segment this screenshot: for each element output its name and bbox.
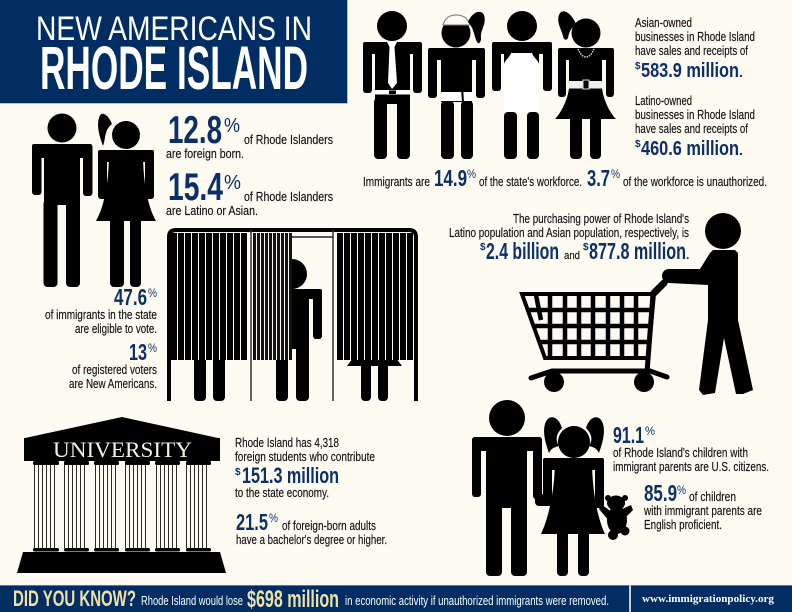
icon: university building: UNIVERSITY xyxy=(53,437,192,462)
text: purchasing power: . xyxy=(686,248,689,262)
stat: bachelor's degree: have a bachelor's degree or higher. xyxy=(236,532,387,547)
stat: children citizens xyxy=(613,422,769,474)
title banner xyxy=(0,0,348,104)
icon: university building xyxy=(17,417,226,573)
icon: four workers xyxy=(363,11,616,159)
text: Latino-owned businesses: 460.6 million xyxy=(641,138,739,160)
text: Asian-owned businesses: Asian-owned xyxy=(635,15,692,30)
text: Asian-owned businesses: 583.9 million xyxy=(641,60,739,82)
text: Latino-owned businesses: . xyxy=(739,142,743,158)
teddy bear xyxy=(599,495,633,540)
parent xyxy=(472,400,550,576)
text: workforce share: of the state's workforce. xyxy=(479,174,582,189)
did you know callout: DID YOU KNOW? xyxy=(13,586,136,611)
stat: eligible to vote: of immigrants in the state xyxy=(45,307,157,322)
text: Asian-owned businesses: . xyxy=(739,64,743,80)
stat: children citizens: % xyxy=(645,424,655,438)
right curtain xyxy=(337,233,413,360)
did you know callout xyxy=(13,586,609,612)
stat: Latino or Asian: are Latino or Asian. xyxy=(166,203,258,218)
text: foreign students: to the state economy. xyxy=(235,485,329,500)
icon: parent, child and teddy bear xyxy=(472,400,633,576)
text: purchasing power: 877.8 million xyxy=(589,238,686,264)
stat: eligible to vote: are eligible to vote. xyxy=(75,321,157,336)
stat: foreign born: of Rhode Islanders xyxy=(244,132,333,147)
stat: Latino or Asian: % xyxy=(224,172,241,194)
text: workforce share: 3.7 xyxy=(587,165,610,191)
shopping cart xyxy=(522,283,667,392)
stat: Latino or Asian: of Rhode Islanders xyxy=(244,189,333,204)
stat: Latino or Asian xyxy=(166,166,333,218)
did you know callout: Rhode Island would lose xyxy=(141,594,243,608)
legs in left booth xyxy=(194,355,225,401)
stat: registered voters xyxy=(69,339,157,391)
text: Asian-owned businesses: businesses in Rhode Island xyxy=(635,29,755,44)
stat: bachelor's degree: of foreign-born adults xyxy=(282,518,376,533)
stat: eligible to vote: % xyxy=(148,286,157,300)
text: Asian-owned businesses xyxy=(635,15,755,82)
stat: bachelor's degree xyxy=(236,509,387,547)
text: workforce share: % xyxy=(467,167,476,181)
text: foreign students: $ xyxy=(235,467,241,478)
stat: registered voters: of registered voters xyxy=(72,362,157,377)
stat: children citizens: 91.1 xyxy=(613,422,644,448)
icon: man and woman xyxy=(32,114,156,287)
stat: children English proficient xyxy=(643,480,762,532)
text: purchasing power: and xyxy=(564,250,580,262)
text: foreign students xyxy=(235,435,375,500)
booth frame xyxy=(169,230,416,401)
stat: foreign born: 12.8 xyxy=(168,109,222,152)
text: Latino-owned businesses: have sales and receipts of xyxy=(635,121,748,136)
worker: businessman with tie xyxy=(363,11,422,159)
worker: apron xyxy=(492,11,552,159)
stat: foreign born: % xyxy=(224,115,240,137)
voter in middle booth xyxy=(276,259,322,401)
stat: eligible to vote: 47.6 xyxy=(114,284,147,310)
stat: children English proficient: 85.9 xyxy=(644,480,677,506)
text: workforce share xyxy=(363,165,767,191)
text: workforce share: Immigrants are xyxy=(363,174,430,189)
stat: registered voters: are New Americans. xyxy=(69,376,157,391)
text: Latino-owned businesses: $ xyxy=(635,139,641,150)
did you know callout: in economic activity if unauthorized immigrants were removed. xyxy=(345,594,609,608)
text: foreign students: Rhode Island has 4,318 xyxy=(235,435,339,450)
stat: children English proficient: English proficient. xyxy=(644,517,722,532)
stat: registered voters: % xyxy=(148,341,157,355)
title banner: NEW AMERICANS IN xyxy=(36,10,312,48)
text: Latino-owned businesses: Latino-owned xyxy=(635,93,692,108)
stat: foreign born: are foreign born. xyxy=(166,146,244,161)
legs and skirt in right booth xyxy=(347,355,402,401)
stat: eligible to vote xyxy=(45,284,157,336)
text: workforce share: 14.9 xyxy=(434,165,467,191)
stat: foreign born xyxy=(166,109,333,161)
text: Asian-owned businesses: $ xyxy=(635,61,641,72)
stat: bachelor's degree: % xyxy=(269,511,278,525)
text: purchasing power: $ xyxy=(480,242,486,253)
text: purchasing power: 2.4 billion xyxy=(486,238,559,264)
text: Latino-owned businesses xyxy=(635,93,755,160)
stat: bachelor's degree: 21.5 xyxy=(236,509,268,535)
icon: person pushing shopping cart xyxy=(522,213,753,395)
worker: woman with necklace and belt xyxy=(555,11,616,159)
stat: registered voters: 13 xyxy=(129,339,147,365)
child xyxy=(541,417,605,576)
text: purchasing power: The purchasing power of Rhode Island's xyxy=(513,211,689,226)
shopper xyxy=(662,213,753,395)
worker: construction woman with hard hat xyxy=(428,12,485,159)
stat: Latino or Asian: 15.4 xyxy=(168,166,223,209)
text: workforce share: % xyxy=(611,167,620,181)
footer bar xyxy=(0,585,792,612)
middle curtain xyxy=(253,233,292,360)
text: purchasing power: Latino population and Asian population, respectively, is xyxy=(449,225,689,240)
text: Asian-owned businesses: have sales and receipts of xyxy=(635,43,748,58)
title banner: RHODE ISLAND xyxy=(40,34,308,102)
columns xyxy=(34,464,210,548)
left curtain xyxy=(171,233,248,360)
icon: voting booths xyxy=(169,230,416,401)
text: purchasing power xyxy=(449,211,689,264)
text: Latino-owned businesses: businesses in Rhode Island xyxy=(635,107,755,122)
stat: children English proficient: of children xyxy=(689,489,736,504)
stat: children English proficient: % xyxy=(677,483,686,497)
text: foreign students: foreign students who contribute xyxy=(235,449,375,464)
text: purchasing power: $ xyxy=(583,242,589,253)
website: www.immigrationpolicy.org xyxy=(642,593,774,605)
stat: children citizens: of Rhode Island's children with xyxy=(613,445,748,460)
text: foreign students: 151.3 million xyxy=(242,463,339,488)
